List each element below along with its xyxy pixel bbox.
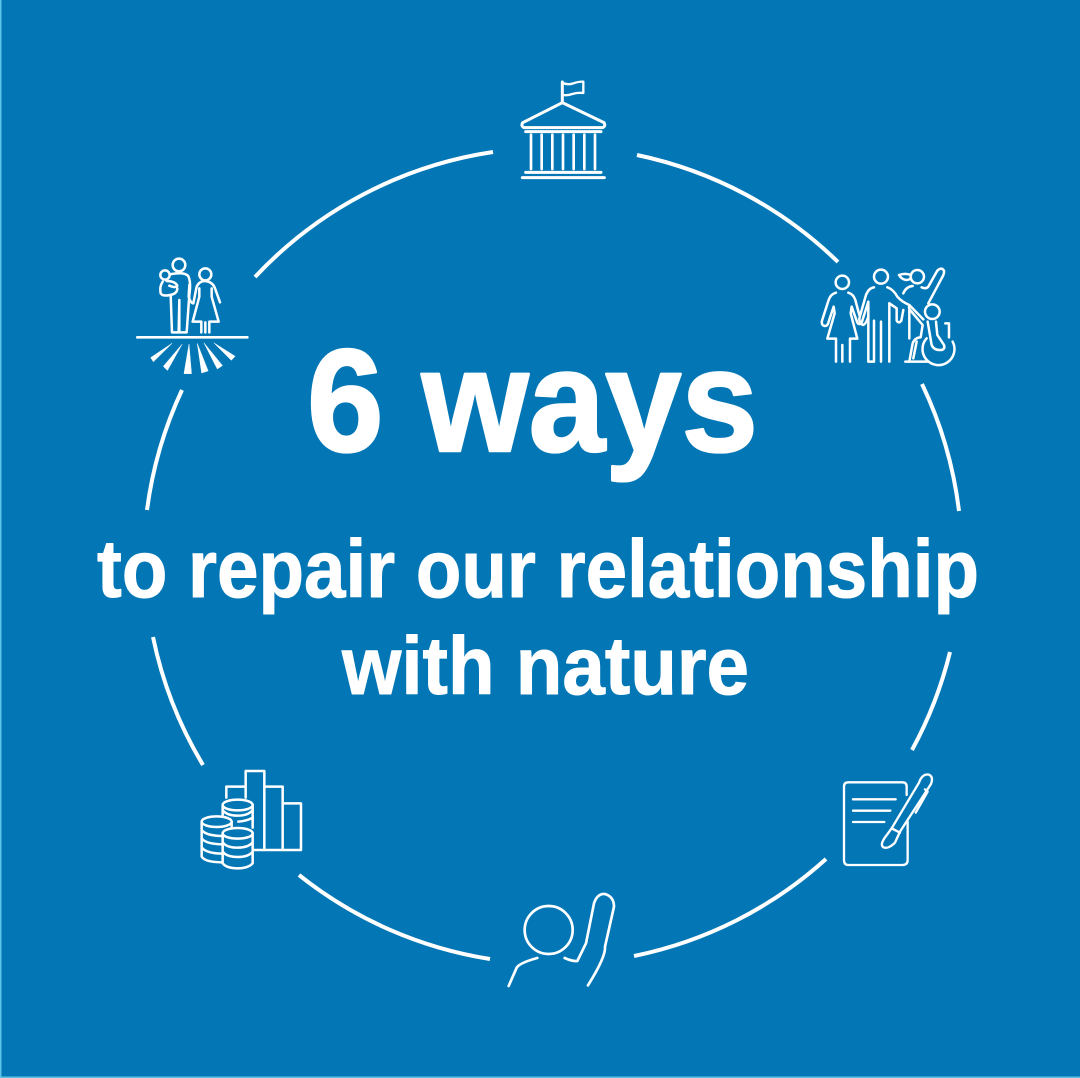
icon: government building with flag xyxy=(522,82,605,178)
icon: family standing on ground with roots xyxy=(137,259,247,374)
icon: document with pen xyxy=(844,774,932,865)
subtitle line: to repair our relationship: to repair our relationship xyxy=(97,524,979,615)
circular ring segments xyxy=(147,152,959,959)
icon: diverse group of people with wheelchair user xyxy=(822,269,954,365)
icon: coin stacks and bar chart xyxy=(202,771,301,868)
icon: person raising hand xyxy=(509,894,614,986)
subtitle line: with nature: with nature xyxy=(341,621,749,712)
title: 6 ways: 6 ways xyxy=(307,319,758,482)
